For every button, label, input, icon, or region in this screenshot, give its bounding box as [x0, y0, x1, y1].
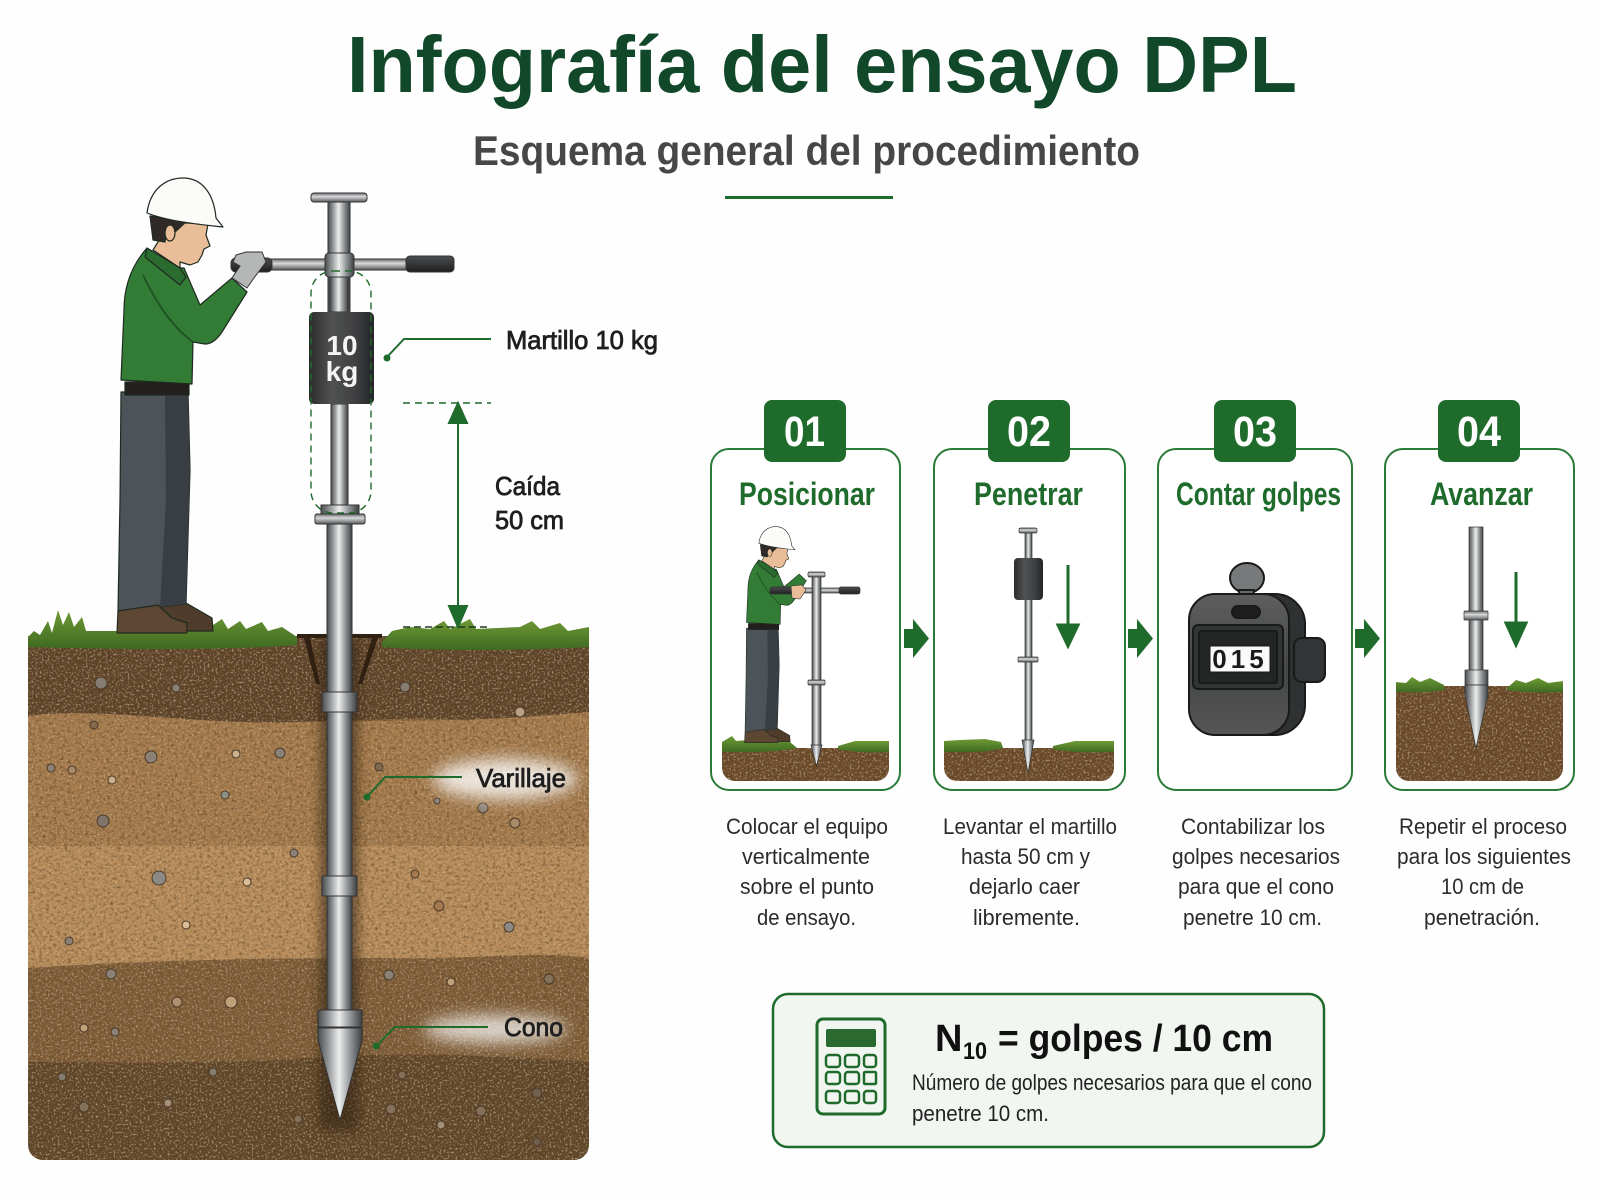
right grip — [406, 256, 454, 272]
description: Levantar el martillo — [943, 814, 1117, 839]
sleeve fold — [143, 275, 193, 342]
badge number: 02 — [1007, 408, 1051, 456]
long rod — [327, 524, 352, 1014]
counter value: 015 — [1212, 644, 1268, 674]
hammer body — [309, 312, 374, 404]
formula description — [912, 1070, 1312, 1126]
description: para los siguientes — [1397, 844, 1571, 869]
panel: step 01 — [711, 400, 900, 930]
double arrow — [449, 403, 467, 627]
description: sobre el punto — [740, 874, 874, 899]
description: golpes necesarios — [1172, 844, 1340, 869]
mini soil — [944, 748, 1114, 781]
calculator screen — [826, 1029, 876, 1047]
coupling — [1464, 611, 1488, 620]
icon: tally counter — [1189, 563, 1325, 735]
label: Varillaje — [476, 763, 566, 793]
label line 1: Caída — [495, 471, 560, 501]
front body — [1189, 594, 1289, 735]
mini grass right — [838, 741, 889, 752]
boot back — [160, 603, 213, 631]
mini soil — [722, 748, 889, 781]
rod — [1469, 527, 1483, 672]
heading: Contar golpes — [1176, 476, 1341, 512]
description: Repetir el proceso — [1399, 814, 1567, 839]
cap — [808, 572, 825, 577]
lever stem — [1239, 590, 1254, 618]
mini worker — [745, 527, 806, 743]
cone — [1022, 740, 1034, 773]
formula description: penetre 10 cm. — [912, 1101, 1049, 1126]
top cap — [311, 193, 367, 202]
mini hammer — [1014, 558, 1043, 600]
shirt — [121, 248, 247, 384]
mini rod — [1464, 527, 1488, 748]
coupling two — [322, 876, 357, 896]
label: Martillo 10 kg — [506, 325, 658, 355]
calculator body — [817, 1019, 885, 1114]
leader — [387, 339, 491, 357]
flange top — [321, 505, 359, 514]
down arrow — [1506, 572, 1526, 645]
hammer — [309, 312, 374, 404]
down arrow — [1058, 565, 1078, 646]
lower neck — [330, 277, 348, 312]
trouser shadow — [160, 394, 190, 607]
worker — [117, 178, 247, 633]
badge — [1438, 400, 1520, 462]
coupling — [1018, 657, 1038, 662]
icon: calculator — [817, 1019, 885, 1114]
coupling — [808, 680, 825, 685]
panel: formula — [773, 994, 1324, 1147]
upper rod — [328, 202, 350, 314]
pebbles — [47, 677, 554, 1146]
description — [1172, 814, 1340, 930]
collar — [325, 253, 354, 277]
callout: martillo — [384, 325, 658, 362]
ground crack — [297, 634, 382, 684]
lever slot — [1232, 606, 1260, 618]
rod — [1025, 533, 1032, 741]
mini soil — [1396, 686, 1563, 781]
arrow 3 to 4 — [1355, 619, 1380, 658]
recess — [1199, 631, 1277, 683]
calculator keys — [826, 1055, 876, 1103]
label: Cono — [504, 1012, 563, 1042]
soil profile — [28, 636, 589, 1160]
formula box — [773, 994, 1324, 1147]
mini grass left — [722, 736, 797, 752]
formula right side: = golpes / 10 cm — [998, 1018, 1273, 1060]
leader — [367, 777, 462, 797]
description: verticalmente — [742, 844, 870, 869]
trousers — [118, 392, 190, 611]
cone collar — [1465, 670, 1488, 685]
panel: step 03 — [1158, 400, 1352, 930]
cone collar — [318, 1010, 362, 1027]
label line 2: 50 cm — [495, 505, 564, 535]
counter window — [1210, 646, 1270, 672]
mini grass left — [1396, 677, 1445, 692]
mini hand — [791, 585, 806, 599]
description: hasta 50 cm y — [961, 844, 1090, 869]
cross bar — [262, 259, 408, 270]
mini grass left — [944, 739, 1003, 752]
title underline — [725, 196, 893, 199]
badge number: 04 — [1457, 408, 1501, 456]
description: libremente. — [973, 905, 1080, 930]
formula description: Número de golpes necesarios para que el cono — [912, 1070, 1312, 1095]
drop height dimension — [403, 403, 564, 627]
boot front — [117, 605, 187, 633]
leader dot — [384, 354, 390, 362]
title: Infografía del ensayo DPL — [347, 20, 1297, 109]
description: de ensayo. — [757, 905, 856, 930]
cross bar — [790, 588, 840, 593]
dot — [372, 1042, 380, 1050]
hammer unit: kg — [326, 356, 358, 387]
heading: Posicionar — [739, 476, 875, 512]
mini grass right — [1053, 741, 1114, 752]
badge — [764, 400, 846, 462]
formula N: N — [935, 1018, 962, 1060]
callout: varillaje — [364, 759, 577, 800]
description: dejarlo caer — [969, 874, 1080, 899]
description — [943, 814, 1117, 930]
knob — [1294, 638, 1325, 682]
hammer travel envelope — [311, 271, 371, 513]
description: penetre 10 cm. — [1183, 905, 1322, 930]
left grip — [770, 587, 792, 594]
description — [1397, 814, 1571, 930]
glow — [423, 1015, 567, 1043]
card — [711, 449, 900, 790]
panel: main cross-section diagram — [28, 178, 658, 1160]
upper dash — [403, 402, 491, 404]
description: Contabilizar los — [1181, 814, 1325, 839]
panel: step 04 — [1385, 400, 1574, 930]
arrow 2 to 3 — [1128, 619, 1153, 658]
left grip — [231, 258, 272, 272]
rod — [812, 576, 821, 746]
flange bottom — [315, 514, 365, 524]
mini grass right — [1507, 678, 1563, 692]
lower dash — [403, 626, 491, 628]
formula subscript: 10 — [963, 1038, 987, 1065]
description: 10 cm de — [1441, 874, 1524, 899]
card — [1158, 449, 1352, 790]
badge — [988, 400, 1070, 462]
description: penetración. — [1424, 905, 1540, 930]
belt — [125, 382, 189, 395]
description — [726, 814, 888, 930]
badge number: 01 — [784, 408, 825, 456]
bezel — [1193, 625, 1283, 689]
subtitle: Esquema general del procedimiento — [473, 127, 1140, 174]
rod and T handle — [231, 193, 454, 1120]
arrow 1 to 2 — [904, 619, 929, 658]
callout: cono — [372, 1012, 567, 1050]
leader — [376, 1027, 488, 1046]
neck and face — [153, 222, 210, 268]
card — [1385, 449, 1574, 790]
borehole shadow — [319, 640, 359, 1130]
hard hat — [147, 178, 223, 227]
mini rod — [770, 572, 860, 766]
cap — [1019, 528, 1037, 533]
right grip — [839, 587, 860, 594]
heading: Penetrar — [974, 476, 1083, 512]
cone — [811, 745, 822, 766]
badge number: 03 — [1233, 408, 1277, 456]
hair — [150, 216, 188, 242]
description: para que el cono — [1178, 874, 1334, 899]
side roller — [1205, 594, 1305, 735]
dot — [364, 794, 370, 800]
cone — [1465, 685, 1488, 748]
mini rod — [1018, 528, 1038, 773]
glove — [232, 252, 266, 288]
cone — [318, 1028, 362, 1120]
badge — [1214, 400, 1296, 462]
coupling one — [322, 692, 357, 712]
ear — [165, 225, 175, 241]
grass left — [28, 610, 297, 649]
description: Colocar el equipo — [726, 814, 888, 839]
collar — [145, 248, 186, 285]
lever knob — [1230, 563, 1264, 593]
card — [934, 449, 1125, 790]
grass right — [382, 619, 589, 650]
heading: Avanzar — [1430, 476, 1533, 512]
lower guide rod — [331, 404, 348, 506]
hammer text: 10 — [326, 330, 358, 361]
panel: step 02 — [934, 400, 1125, 930]
glow — [433, 759, 577, 799]
